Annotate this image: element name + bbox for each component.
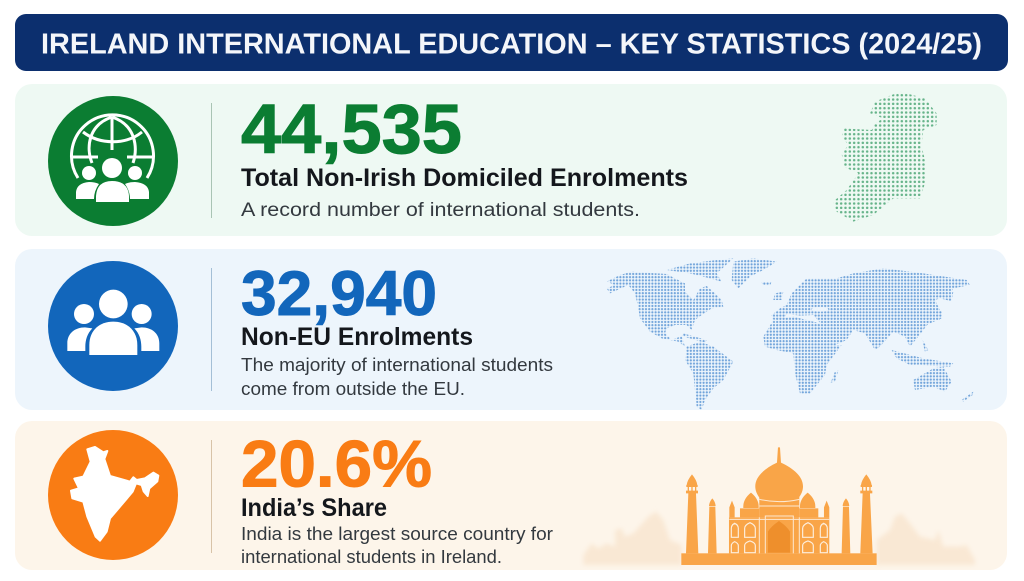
description: India is the largest source country for xyxy=(241,524,553,544)
description: come from outside the EU. xyxy=(241,379,465,399)
panel: total enrolments xyxy=(15,84,1007,236)
stat heading: India’s Share xyxy=(241,494,387,522)
stat number: 20.6% xyxy=(241,426,432,500)
description: international students in Ireland. xyxy=(241,547,502,567)
panel: non-EU enrolments xyxy=(15,249,1007,410)
divider xyxy=(211,103,212,218)
stat number: 44,535 xyxy=(241,90,462,168)
description: The majority of international students xyxy=(241,355,553,375)
divider xyxy=(211,440,212,553)
illustration: Taj Mahal xyxy=(583,447,975,565)
icon: India map xyxy=(48,430,178,560)
stat heading: Non-EU Enrolments xyxy=(241,323,473,351)
icon: globe with people xyxy=(48,96,178,226)
title: IRELAND INTERNATIONAL EDUCATION – KEY STATISTICS (2024/25) xyxy=(41,28,982,60)
stat heading: Total Non-Irish Domiciled Enrolments xyxy=(241,164,688,192)
map: Ireland dots xyxy=(833,92,937,222)
description: A record number of international students. xyxy=(241,200,640,221)
map: world dots xyxy=(607,258,973,410)
title banner xyxy=(15,14,1008,71)
stat number: 32,940 xyxy=(241,259,437,329)
icon: people group xyxy=(48,261,178,391)
divider xyxy=(211,268,212,391)
panel: India's share xyxy=(15,421,1007,570)
